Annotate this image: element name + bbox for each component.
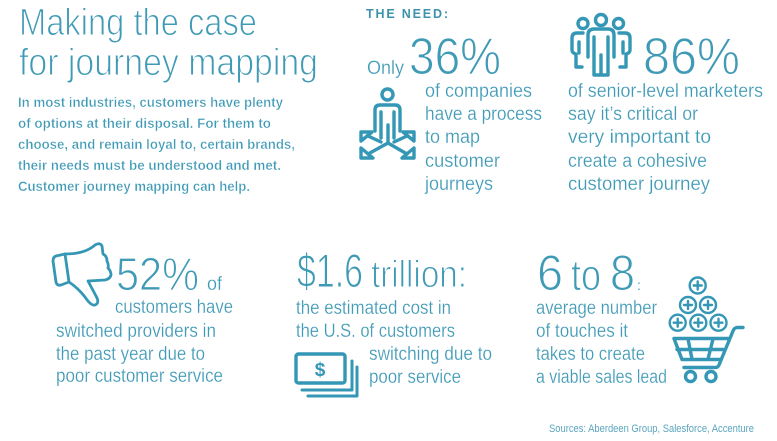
intro text block: of options at their disposal. For them to: [18, 115, 271, 131]
stat: 86 percent: [568, 28, 763, 195]
stat: 1.6 trillion dollars: $1.6: [297, 244, 363, 297]
stat: 1.6 trillion dollars: poor service: [369, 367, 461, 388]
heading: the need: THE NEED:: [366, 7, 448, 21]
stat: 36 percent: journeys: [424, 174, 493, 195]
stat: 6 to 8 touches: of touches it: [536, 321, 629, 342]
stat: 36 percent: of companies: [425, 81, 532, 102]
stat: 6 to 8 touches: takes to create: [536, 344, 645, 365]
stat: 6 to 8 touches: :: [637, 277, 641, 293]
stat: 36 percent: customer: [425, 151, 501, 172]
stat: 86 percent: of senior-level marketers: [568, 81, 763, 102]
stat: 52 percent: customers have: [115, 297, 233, 318]
intro text block: [18, 94, 295, 194]
title: for journey mapping: [19, 42, 318, 84]
icon: person with four arrows: [361, 89, 414, 158]
stat: 36 percent: Only: [367, 58, 404, 79]
stat: 52 percent: switched providers in: [56, 321, 216, 342]
stat: 36 percent: [367, 28, 542, 195]
stat: 36 percent: have a process: [425, 104, 542, 125]
intro text block: choose, and remain loyal to, certain brands,: [18, 136, 295, 152]
icon: thumbs down: [53, 244, 111, 305]
intro text block: their needs must be understood and met.: [18, 157, 281, 173]
stat: 86 percent: customer journey: [568, 174, 710, 195]
stat: 6 to 8 touches: average number: [536, 298, 658, 319]
intro text block: In most industries, customers have plenty: [18, 94, 283, 110]
title: Making the case: [19, 2, 257, 44]
stat: 52 percent: of: [207, 274, 223, 295]
stat: 36 percent: to map: [425, 127, 480, 148]
stat: 52 percent: 52%: [116, 248, 199, 300]
stat: 1.6 trillion dollars: trillion:: [371, 254, 467, 296]
title: [19, 2, 318, 84]
stat: 6 to 8 touches: a viable sales lead: [536, 367, 667, 388]
stat: 1.6 trillion dollars: the U.S. of customers: [296, 321, 455, 342]
stat: 6 to 8 touches: to: [571, 251, 601, 300]
icon: group of three people: [572, 14, 630, 75]
stat: 52 percent: the past year due to: [56, 344, 205, 365]
icon: stack of banknotes: $: [315, 360, 326, 381]
stat: 6 to 8 touches: 6: [537, 245, 563, 301]
stat: 52 percent: [56, 248, 233, 387]
icon: stack of banknotes: [296, 354, 357, 396]
stat: 86 percent: very important to: [568, 127, 711, 148]
stat: 36 percent: 36%: [409, 28, 501, 86]
stat: 1.6 trillion dollars: the estimated cost in: [296, 298, 451, 319]
stat: 86 percent: say it’s critical or: [568, 104, 699, 125]
stat: 6 to 8 touches: [536, 245, 667, 388]
stat: 86 percent: create a cohesive: [568, 151, 707, 172]
stat: 52 percent: poor customer service: [56, 366, 223, 387]
stat: 1.6 trillion dollars: [296, 244, 492, 388]
intro text block: Customer journey mapping can help.: [18, 178, 250, 194]
stat: 1.6 trillion dollars: switching due to: [369, 344, 492, 365]
stat: 6 to 8 touches: 8: [610, 245, 635, 301]
stat: 86 percent: 86%: [643, 28, 740, 86]
icon: shopping cart of plus coins: [670, 278, 743, 382]
